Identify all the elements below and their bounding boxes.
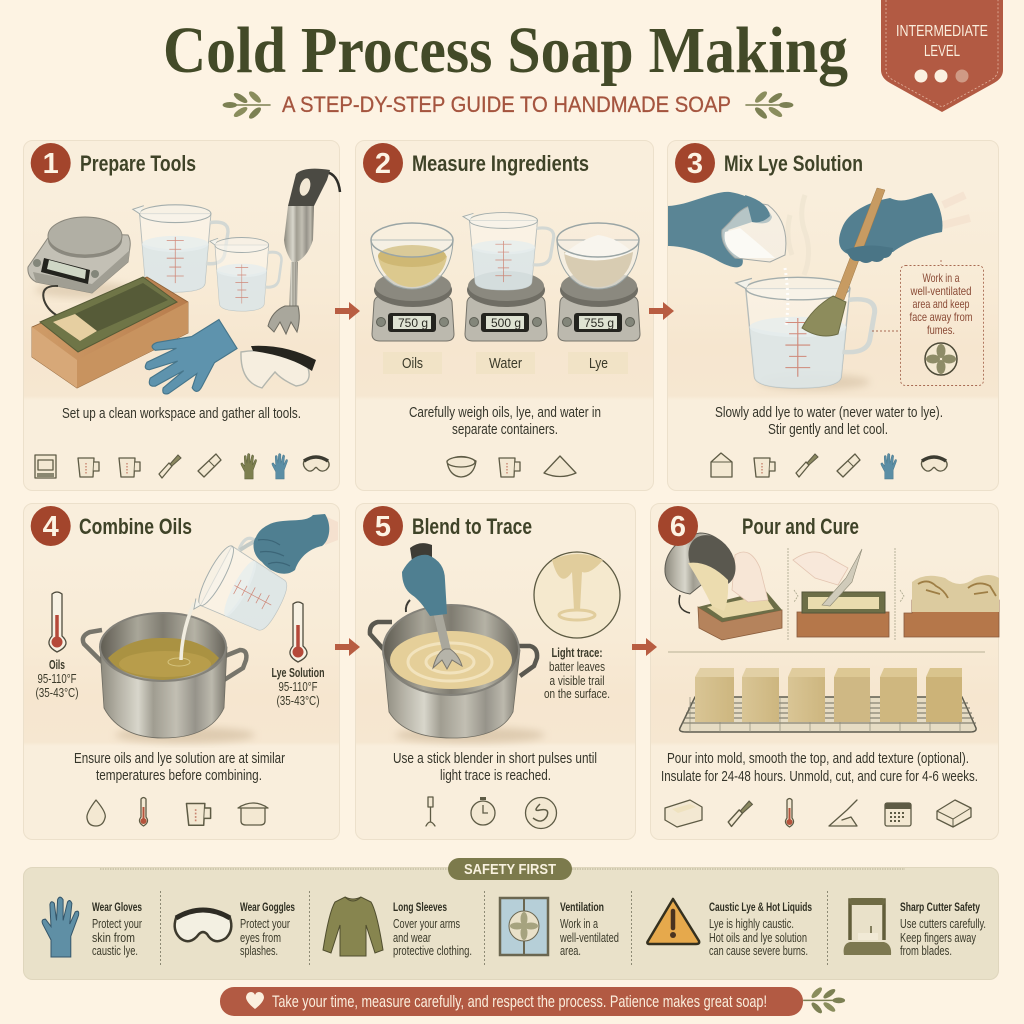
note: light trace: on the surface. xyxy=(544,687,610,701)
stick blender and gloved hand xyxy=(402,543,462,669)
step number 3: 3 xyxy=(687,148,703,180)
textured soap scene xyxy=(904,575,999,637)
arrow 5 to 6 xyxy=(632,638,657,656)
steam xyxy=(788,195,809,275)
cooling rack with soap bars xyxy=(680,668,976,732)
scale with water jug: 500 g xyxy=(491,316,521,330)
pouring stream xyxy=(181,603,194,660)
step number 2 xyxy=(363,143,403,183)
arrow 4 to 5 xyxy=(335,638,360,656)
item: wear goggles: splashes. xyxy=(240,944,278,958)
item: ventilation: Ventilation xyxy=(560,900,604,914)
panel: safety first xyxy=(24,858,998,980)
measuring jug with water xyxy=(736,268,875,390)
panel: step 3 mix lye solution xyxy=(668,140,998,490)
item: wear gloves: Wear Gloves xyxy=(92,900,142,914)
dividers xyxy=(160,891,828,965)
panel: step 1 prepare tools xyxy=(24,140,340,490)
item: wear goggles: eyes from xyxy=(240,931,281,945)
item: ventilation: Work in a xyxy=(560,917,598,931)
callout: ventilation: face away from xyxy=(910,310,972,324)
callout: ventilation: Work in a xyxy=(922,271,960,285)
caption xyxy=(661,751,978,785)
right gloved hand with spatula xyxy=(802,188,970,336)
note: light trace: a visible trail xyxy=(550,674,604,688)
item: sharp cutter safety: Use cutters carefully. xyxy=(900,917,986,931)
smooth scene xyxy=(793,549,889,637)
caption: light trace is reached. xyxy=(440,768,551,784)
heading: Pour and Cure xyxy=(742,514,859,539)
arrow 1 to 2 xyxy=(335,302,360,320)
item: long sleeves: protective clothing. xyxy=(393,944,472,958)
panel: step 5 blend to trace xyxy=(356,504,636,840)
caption xyxy=(393,751,597,784)
item: long sleeves xyxy=(323,897,472,958)
caption: Carefully weigh oils, lye, and water in xyxy=(409,405,601,421)
label: lye: Lye xyxy=(589,355,608,372)
tool icons xyxy=(35,454,329,479)
caption xyxy=(715,405,943,438)
step icons xyxy=(711,453,947,479)
label: oils temperature: 95-110°F xyxy=(38,672,77,686)
footer sprig xyxy=(803,986,845,1015)
safety heading pill xyxy=(448,858,572,880)
badge: intermediate level xyxy=(881,0,1003,112)
heading: Blend to Trace xyxy=(412,514,532,539)
footer banner: Take your time, measure carefully, and respect the process. Patience makes great soap! xyxy=(272,992,767,1011)
item: wear goggles: Wear Goggles xyxy=(240,900,295,914)
section line xyxy=(668,651,985,653)
item: wear gloves xyxy=(42,897,142,958)
item: long sleeves: and wear xyxy=(393,931,431,945)
step number 6 xyxy=(658,506,698,546)
caption: Stir gently and let cool. xyxy=(768,422,888,438)
scale with lye xyxy=(557,223,640,341)
item: caustic lye and hot liquids: Caustic Lye & Hot Liquids xyxy=(709,900,812,914)
step icons xyxy=(665,798,971,827)
arrow 2 to 3 xyxy=(649,302,674,320)
note: light trace: batter leaves xyxy=(549,660,605,674)
level dots xyxy=(914,70,968,82)
item: sharp cutter safety: Sharp Cutter Safety xyxy=(900,900,980,914)
stockpot with batter xyxy=(370,605,545,743)
item: sharp cutter safety xyxy=(844,898,986,958)
item: wear goggles xyxy=(175,900,295,958)
footer banner xyxy=(220,987,803,1016)
panel: step 6 pour and cure xyxy=(650,504,999,840)
title: Cold Process Soap Making xyxy=(163,14,848,87)
soap mold xyxy=(32,277,188,388)
item: sharp cutter safety: Keep fingers away xyxy=(900,931,977,945)
label: oils temperature: (35-43°C) xyxy=(36,686,78,700)
step number 6: 6 xyxy=(670,511,686,543)
step number 5 xyxy=(363,506,403,546)
caption xyxy=(409,405,601,438)
label: lye temperature: (35-43°C) xyxy=(276,694,320,708)
callout: ventilation: area and keep xyxy=(912,297,970,311)
small measuring jug xyxy=(210,238,282,311)
pour scene xyxy=(665,526,782,640)
caption: Ensure oils and lye solution are at similar xyxy=(74,751,285,767)
digital scale xyxy=(28,217,135,318)
label: oils xyxy=(383,352,442,374)
safety heading pill: SAFETY FIRST xyxy=(464,861,556,878)
stockpot with oil xyxy=(83,613,255,743)
step number 5: 5 xyxy=(375,511,391,543)
item: wear gloves: skin from xyxy=(92,931,135,945)
caption: Slowly add lye to water (never water to lye). xyxy=(715,405,943,421)
step icons xyxy=(87,798,268,826)
caption: separate containers. xyxy=(452,422,558,438)
note: light trace xyxy=(544,646,610,701)
heading: Measure Ingredients xyxy=(412,151,589,176)
label: water xyxy=(476,352,535,374)
dividers and chevrons xyxy=(788,548,904,640)
step number 4 xyxy=(31,506,71,546)
note: light trace: Light trace: xyxy=(552,646,602,660)
item: caustic lye and hot liquids: Lye is highly caustic. xyxy=(709,917,794,931)
scale with oils xyxy=(371,223,454,341)
left gloved hand with lye cup xyxy=(668,192,786,267)
item: caustic lye and hot liquids: can cause severe burns. xyxy=(709,944,808,958)
label: lye temperature: 95-110°F xyxy=(278,680,318,694)
badge: intermediate level: LEVEL xyxy=(924,43,960,60)
safety goggles xyxy=(241,346,316,388)
label: oils temperature: Oils xyxy=(49,658,65,672)
item: wear gloves: caustic lye. xyxy=(92,944,138,958)
tilted jug xyxy=(190,528,302,644)
caption xyxy=(74,751,285,784)
item: long sleeves: Long Sleeves xyxy=(393,900,447,914)
large measuring jug xyxy=(133,205,228,292)
item: wear goggles: Protect your xyxy=(240,917,290,931)
caption: Set up a clean workspace and gather all tools. xyxy=(62,406,301,422)
caption: Use a stick blender in short pulses until xyxy=(393,751,597,767)
label: oils: Oils xyxy=(402,355,423,372)
item: caustic lye and hot liquids: Hot oils and lye solution xyxy=(709,931,807,945)
item: sharp cutter safety: from blades. xyxy=(900,944,952,958)
step number 2: 2 xyxy=(375,148,391,180)
item: ventilation xyxy=(500,898,619,958)
label: lye xyxy=(568,352,628,374)
step number 1 xyxy=(31,143,71,183)
step icons xyxy=(426,797,556,828)
scale with oils: 750 g xyxy=(398,316,428,330)
scale with lye: 755 g xyxy=(584,316,614,330)
badge: intermediate level: INTERMEDIATE xyxy=(896,23,988,40)
item: caustic lye and hot liquids xyxy=(647,899,812,958)
heading: Combine Oils xyxy=(79,514,192,539)
soap bars xyxy=(695,668,962,722)
callout: ventilation xyxy=(872,260,984,386)
caption: temperatures before combining. xyxy=(96,768,262,784)
icon: fan xyxy=(925,343,957,375)
gloved hand xyxy=(240,514,338,574)
heading: Mix Lye Solution xyxy=(724,151,863,176)
blue glove xyxy=(133,308,245,411)
ingredient icons xyxy=(447,456,576,477)
callout: ventilation: well-ventilated xyxy=(910,284,972,298)
icon: heart xyxy=(246,992,264,1009)
callout: ventilation: fumes. xyxy=(927,323,955,337)
label: water: Water xyxy=(489,355,522,372)
scale with water jug xyxy=(463,213,554,341)
subtitle with sprigs: A STEP-DY-STEP GUIDE TO HANDMADE SOAP xyxy=(282,92,731,117)
item: long sleeves: Cover your arms xyxy=(393,917,460,931)
panel: step 2 measure ingredients xyxy=(356,140,654,490)
item: wear gloves: Protect your xyxy=(92,917,142,931)
step number 4: 4 xyxy=(43,511,59,543)
step number 3 xyxy=(675,143,715,183)
item: ventilation: well-ventilated xyxy=(559,931,619,945)
item: ventilation: area. xyxy=(560,944,581,958)
thermometer: oils xyxy=(49,592,66,652)
magnifier: light trace xyxy=(534,552,620,638)
stick blender xyxy=(268,169,340,334)
label: oils temperature xyxy=(36,658,78,700)
heading: Prepare Tools xyxy=(80,151,196,176)
label: lye temperature: Lye Solution xyxy=(272,666,324,680)
label: lye temperature xyxy=(272,666,324,708)
panel: step 4 combine oils xyxy=(24,504,340,840)
thermometer: lye solution xyxy=(290,602,307,662)
step number 1: 1 xyxy=(43,148,59,180)
